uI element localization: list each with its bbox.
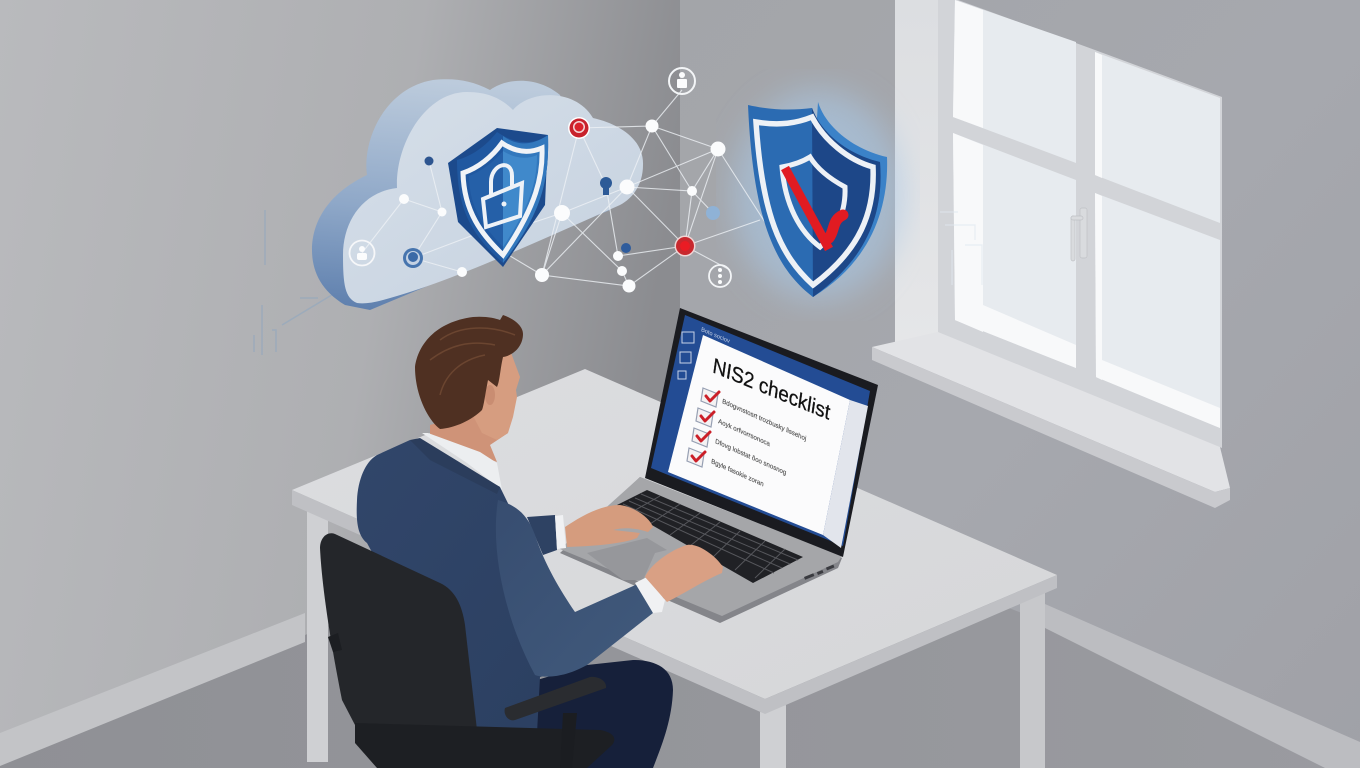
screen right pane — [823, 400, 868, 548]
cloud front — [343, 92, 643, 303]
cloud — [312, 79, 643, 310]
hand near — [645, 545, 723, 602]
trousers — [477, 660, 673, 768]
window frame — [938, 0, 1222, 448]
chair arm post — [560, 713, 577, 768]
jacket far arm — [527, 515, 557, 555]
white collar — [422, 433, 502, 490]
right shield with red check — [748, 102, 887, 297]
face — [470, 340, 520, 440]
node: info ring — [709, 265, 731, 287]
laptop screen bezel — [645, 308, 878, 557]
faint left data glyphs — [254, 210, 340, 355]
window pane top left — [953, 0, 1076, 163]
chair seat — [355, 723, 614, 768]
trackpad — [587, 538, 667, 580]
neck — [430, 410, 508, 462]
checklist rows: Bgyle fasokie zoran — [711, 458, 764, 489]
node: user ring top — [669, 68, 695, 94]
jacket lapel — [410, 438, 500, 494]
left wall — [0, 0, 682, 768]
window — [872, 0, 1230, 508]
checklist rows — [687, 388, 807, 489]
screen page white — [668, 335, 850, 535]
laptop base — [560, 477, 842, 623]
hand far — [565, 505, 653, 547]
padlock icon — [483, 165, 522, 227]
window handle — [1071, 208, 1087, 261]
cloud back extrusion — [312, 79, 610, 310]
table legs — [307, 505, 328, 762]
node: user ring left — [350, 240, 374, 266]
node: dark blue — [424, 156, 434, 166]
jacket near arm — [496, 500, 653, 677]
window pane highlights — [953, 0, 1220, 428]
window sill — [872, 332, 1230, 492]
person — [320, 315, 723, 768]
chair back — [320, 533, 477, 768]
window pane bottom right — [1095, 193, 1220, 428]
screen UI blue — [651, 315, 870, 546]
network nodes — [350, 68, 731, 292]
window pane bottom left — [953, 133, 1076, 368]
node: red upper — [568, 117, 590, 139]
node: blue ring — [403, 248, 423, 268]
keyboard — [617, 490, 803, 583]
checklist heading: NIS2 checklist — [711, 354, 832, 425]
node: red lower — [674, 236, 696, 256]
left shield with padlock — [448, 128, 548, 267]
network lines — [362, 90, 770, 286]
checklist rows: Bdogvnstosrt trozbusky lissehoj — [722, 398, 807, 443]
laptop — [560, 308, 878, 623]
screen top bar label: Boto sociov — [701, 327, 730, 345]
floor — [0, 480, 1360, 768]
table — [292, 369, 1057, 768]
red check mark — [785, 168, 843, 249]
table edge — [292, 490, 1057, 714]
node: keyhole — [600, 177, 612, 195]
shirt cuff far — [555, 515, 566, 549]
hair strands — [430, 328, 515, 395]
checklist rows: Dfovg lobstat ôoo snosnog — [715, 438, 787, 477]
right wall — [680, 0, 1360, 768]
shirt cuff near — [635, 577, 665, 613]
checklist rows: Aoyk orfvorrsonoca — [718, 418, 771, 448]
table top — [292, 369, 1057, 699]
side ports — [804, 565, 834, 580]
sidebar icons — [678, 332, 694, 379]
chair arm — [505, 677, 606, 720]
right baseboard — [1045, 604, 1360, 768]
chair arm stub — [328, 633, 342, 652]
window reveal — [895, 0, 938, 345]
faint right data glyphs — [940, 212, 982, 285]
node: blue small — [621, 243, 631, 253]
node: light blue — [706, 206, 720, 220]
jacket — [357, 440, 587, 752]
window pane top right — [1095, 52, 1220, 223]
blue glow behind right shield — [733, 90, 903, 300]
hair — [415, 315, 523, 429]
ear — [485, 385, 495, 405]
left baseboard — [0, 613, 305, 766]
